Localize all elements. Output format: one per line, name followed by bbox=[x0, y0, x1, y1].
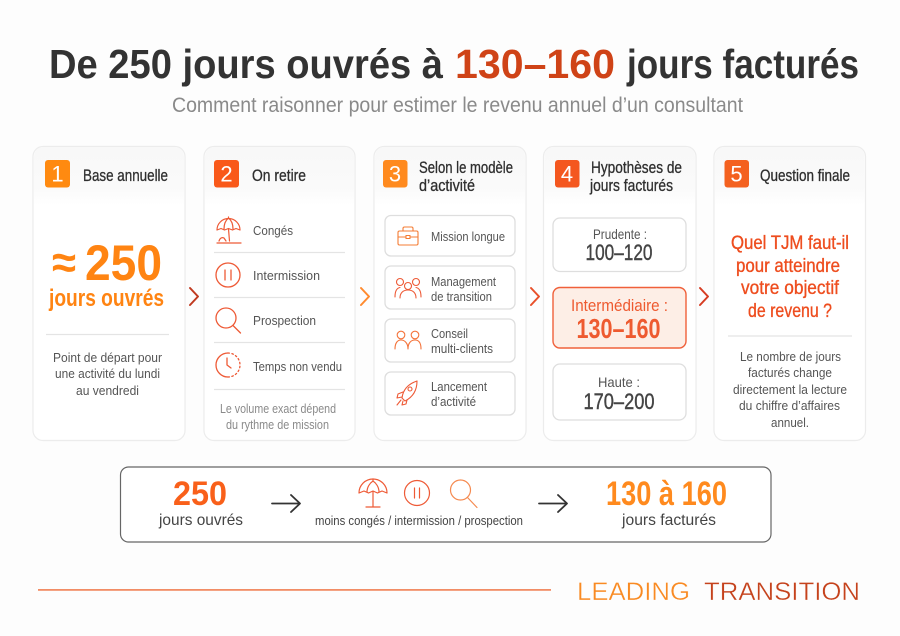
box: conseil multi-clients bbox=[385, 319, 515, 362]
logo bbox=[577, 578, 860, 606]
label Prospection: Prospection bbox=[253, 313, 316, 328]
box: prudente bbox=[553, 218, 686, 272]
question: votre objectif bbox=[741, 278, 840, 299]
heading 1: Base annuelle bbox=[83, 167, 168, 185]
summary 130 à 160 bbox=[606, 475, 727, 529]
arrow 2 to 3 bbox=[361, 288, 369, 305]
description 1 bbox=[53, 350, 163, 398]
question bbox=[731, 233, 849, 322]
title: jours facturés bbox=[626, 41, 859, 87]
box: mission longue bbox=[385, 216, 515, 256]
arrow bbox=[272, 495, 300, 512]
summary 130 à 160: 130 à 160 bbox=[606, 475, 727, 513]
badge 3: 3 bbox=[389, 162, 401, 186]
box: prudente: Prudente : bbox=[593, 226, 647, 242]
box: haute: 170–200 bbox=[584, 389, 654, 414]
panel: 5 question finale bbox=[714, 146, 866, 440]
caption: moins congés / intermission / prospection bbox=[315, 513, 523, 528]
badge 3 bbox=[383, 160, 408, 188]
box: lancement d'activité: d’activité bbox=[431, 394, 476, 409]
description 1: Point de départ pour bbox=[53, 350, 163, 365]
badge 5 bbox=[724, 160, 749, 188]
box: conseil multi-clients: multi-clients bbox=[431, 341, 493, 356]
heading 3 bbox=[419, 159, 513, 195]
question: Quel TJM faut-il bbox=[731, 233, 849, 254]
summary 250: jours ouvrés bbox=[158, 512, 243, 529]
icon: magnifier small bbox=[450, 480, 477, 508]
icon: clock bbox=[216, 353, 240, 377]
label Congés: Congés bbox=[253, 223, 293, 238]
panel: 2 on retire bbox=[204, 146, 355, 440]
box: lancement d'activité: Lancement bbox=[431, 379, 487, 394]
question: pour atteindre bbox=[736, 256, 840, 277]
badge 2: 2 bbox=[220, 162, 233, 186]
label Temps non vendu: Temps non vendu bbox=[253, 359, 342, 374]
title: 130–160 bbox=[455, 41, 615, 87]
big number 250: 250 bbox=[85, 235, 162, 291]
box: management de transition: de transition bbox=[431, 289, 492, 304]
arrow 1 to 2 bbox=[190, 288, 198, 305]
icon: umbrella bbox=[217, 217, 241, 243]
badge 5: 5 bbox=[730, 162, 743, 186]
badge 1: 1 bbox=[51, 162, 64, 186]
footnote 2 bbox=[220, 401, 336, 432]
box: prudente: 100–120 bbox=[586, 240, 652, 265]
summary band bbox=[120, 467, 771, 542]
panel: 3 selon le modèle bbox=[374, 146, 526, 440]
icon: umbrella small bbox=[359, 479, 387, 507]
description 5: Le nombre de jours bbox=[740, 349, 841, 364]
question: de revenu ? bbox=[748, 301, 832, 322]
logo: LEADING bbox=[577, 578, 690, 606]
summary 130 à 160: jours facturés bbox=[621, 512, 716, 529]
panel: 1 base annuelle bbox=[33, 146, 185, 440]
logo: TRANSITION bbox=[704, 578, 860, 606]
description 1: au vendredi bbox=[76, 383, 139, 398]
footnote 2: Le volume exact dépend bbox=[220, 401, 336, 416]
description 5 bbox=[733, 349, 847, 430]
box: intermédiaire: Intermédiaire : bbox=[571, 296, 668, 315]
subtitle: Comment raisonner pour estimer le revenu annuel d’un consultant bbox=[172, 94, 743, 117]
icon: pause small bbox=[404, 480, 430, 506]
box: intermédiaire bbox=[553, 288, 686, 348]
label Intermission: Intermission bbox=[253, 268, 320, 283]
heading 5: Question finale bbox=[760, 167, 850, 185]
badge 1 bbox=[45, 160, 70, 188]
description 1: une activité du lundi bbox=[55, 366, 160, 381]
box: haute: Haute : bbox=[598, 374, 640, 390]
heading 2: On retire bbox=[252, 167, 306, 185]
big number 250 bbox=[48, 235, 164, 312]
box: management de transition: Management bbox=[431, 274, 496, 289]
heading 4: Hypothèses de bbox=[591, 159, 682, 177]
big number 250: jours ouvrés bbox=[48, 285, 164, 312]
panel: 4 hypothèses bbox=[544, 146, 696, 440]
icon: pause bbox=[216, 263, 240, 287]
badge 4 bbox=[555, 160, 580, 188]
description 5: du chiffre d’affaires bbox=[739, 398, 840, 413]
heading 4 bbox=[589, 159, 682, 195]
heading 3: d’activité bbox=[419, 177, 475, 195]
box: haute bbox=[553, 364, 686, 420]
footnote 2: du rythme de mission bbox=[226, 417, 329, 432]
heading 3: Selon le modèle bbox=[419, 159, 513, 177]
heading 4: jours facturés bbox=[589, 177, 673, 195]
box: conseil multi-clients: Conseil bbox=[431, 326, 468, 341]
description 5: annuel. bbox=[771, 415, 809, 430]
badge 2 bbox=[214, 160, 239, 188]
arrow bbox=[539, 495, 567, 512]
badge 4: 4 bbox=[561, 162, 573, 186]
summary 250 bbox=[158, 475, 243, 529]
title: De 250 jours ouvrés à bbox=[49, 41, 443, 87]
icon: magnifier bbox=[216, 308, 240, 333]
description 5: directement la lecture bbox=[733, 382, 847, 397]
arrow 4 to 5 bbox=[700, 288, 708, 305]
box: management de transition bbox=[385, 266, 515, 309]
box: intermédiaire: 130–160 bbox=[576, 313, 660, 344]
title bbox=[49, 41, 859, 87]
description 5: facturés change bbox=[748, 365, 832, 380]
footer rule bbox=[38, 589, 551, 591]
box: lancement d'activité bbox=[385, 372, 515, 415]
box: mission longue: Mission longue bbox=[431, 229, 505, 244]
arrow 3 to 4 bbox=[531, 288, 539, 305]
big number 250: ≈ bbox=[52, 236, 76, 288]
summary 250: 250 bbox=[173, 475, 227, 513]
